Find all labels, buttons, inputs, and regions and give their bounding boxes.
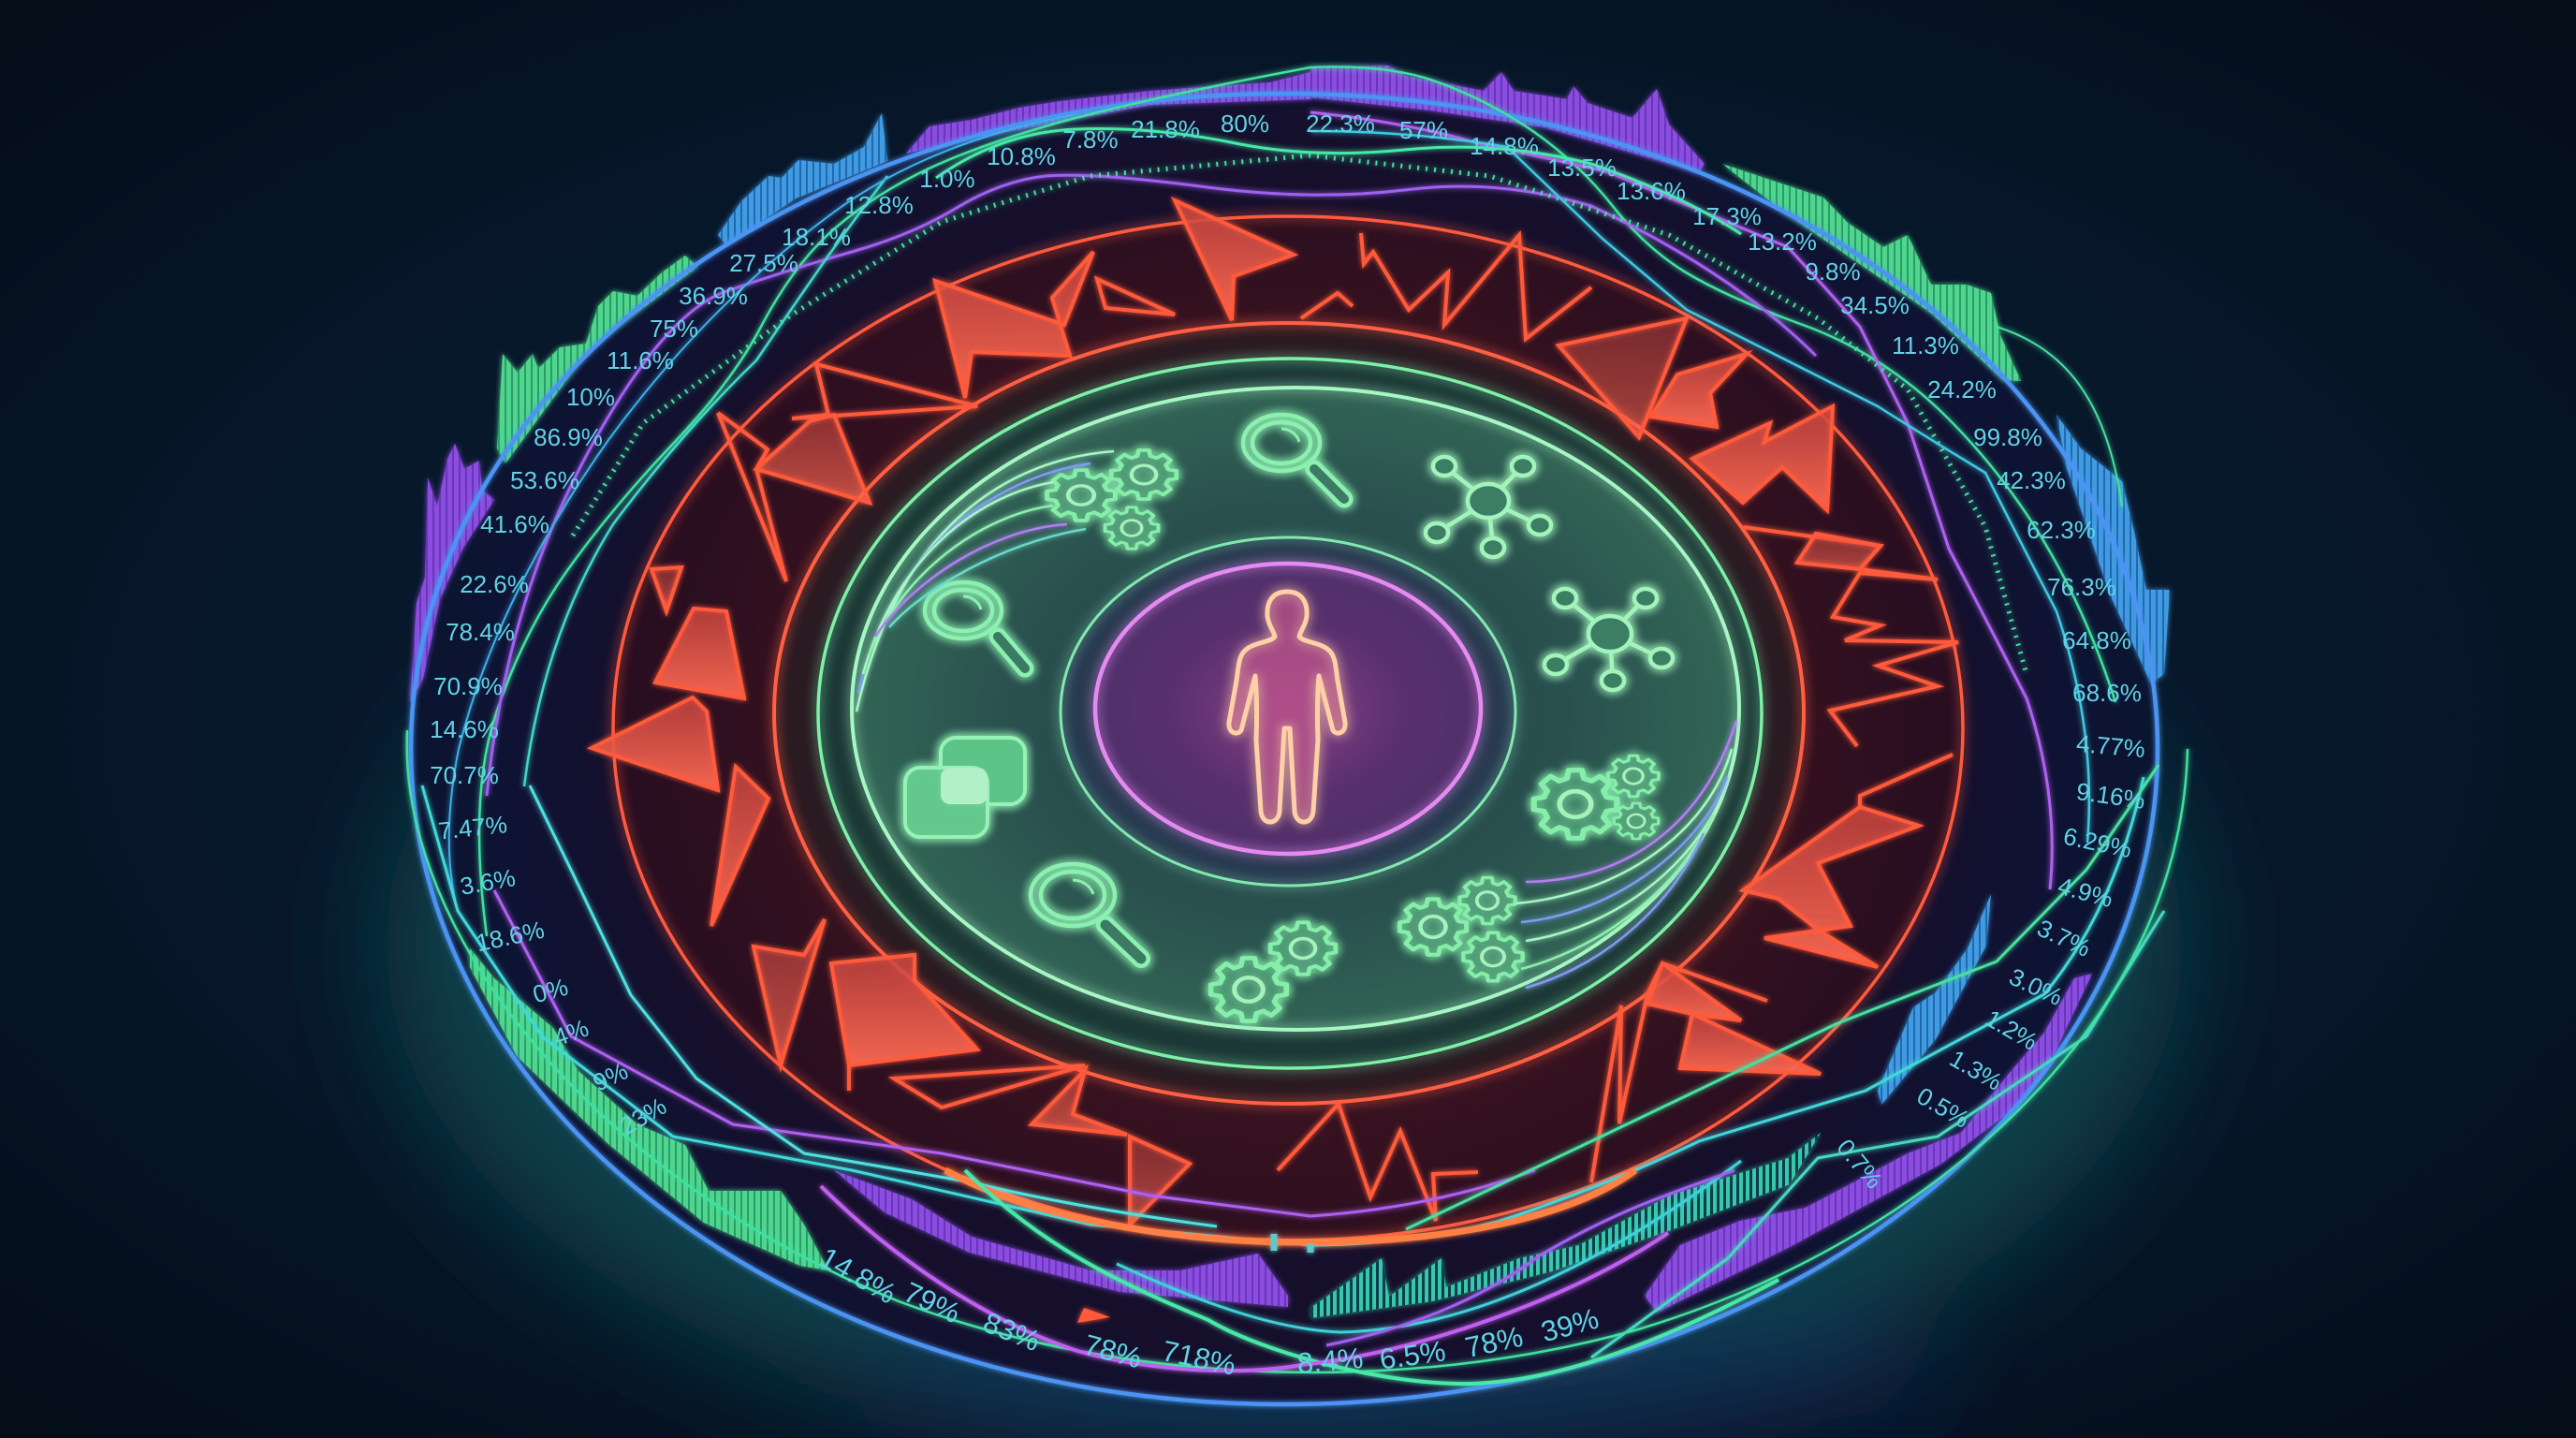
labels: left arc upper: 10.8% bbox=[987, 142, 1056, 170]
labels: left arc upper: 1.0% bbox=[919, 165, 975, 193]
green icons bbox=[905, 415, 1673, 1021]
labels: right arc upper: 64.8% bbox=[2062, 626, 2131, 654]
histogram: teal bottom bbox=[1310, 1133, 1821, 1318]
orbit: right tail bbox=[1997, 327, 2122, 506]
icon: network upper bbox=[1426, 457, 1551, 557]
histogram: purple top right bbox=[1310, 66, 1705, 172]
shard: top bbox=[1175, 200, 1294, 320]
labels: right arc upper: 99.8% bbox=[1973, 423, 2042, 451]
labels: bottom arc: 79% bbox=[899, 1275, 965, 1329]
shard: right zigzag bbox=[1743, 527, 1958, 746]
labels: left arc upper: 70.9% bbox=[433, 672, 503, 700]
shard: top zigzag bbox=[1361, 233, 1591, 339]
icon: magnifier top bbox=[1243, 415, 1344, 499]
shard: stray fragment bottom bbox=[1077, 1308, 1110, 1323]
labels: left arc upper: 41.6% bbox=[480, 510, 549, 538]
shard: upper right fold bbox=[1651, 354, 1747, 427]
histogram ring bbox=[410, 66, 2170, 1318]
shard: left thin lines bbox=[792, 364, 977, 418]
labels: bottom arc: 83% bbox=[978, 1306, 1045, 1357]
labels: right arc upper: 34.5% bbox=[1840, 291, 1910, 319]
orbit: teal upper right bbox=[1310, 131, 2089, 843]
orbit: purple lower bbox=[494, 890, 1535, 1216]
orbit: dotted green bbox=[573, 155, 2027, 674]
labels: left arc lower: 9% bbox=[589, 1056, 632, 1097]
labels: right arc upper: 57% bbox=[1399, 116, 1448, 144]
shard: small triangle bbox=[1097, 279, 1175, 315]
orbit: blue teal left bbox=[449, 114, 1076, 911]
orbit: green up right bbox=[1406, 765, 2159, 1229]
labels: right arc lower: 1.3% bbox=[1945, 1044, 2007, 1096]
labels: right arc lower: 9.16% bbox=[2074, 777, 2147, 814]
small teal bars bbox=[1274, 1234, 1310, 1253]
orbit lines bbox=[407, 66, 2188, 1404]
shard: lower right wedge bbox=[1647, 963, 1741, 1020]
ring: red inner bbox=[774, 323, 1804, 1104]
labels: right arc upper: 17.3% bbox=[1692, 202, 1762, 230]
shard: lower right large bbox=[1680, 1014, 1821, 1074]
labels: left arc upper: 7.8% bbox=[1062, 125, 1119, 154]
ring: purple bbox=[1095, 564, 1481, 854]
labels: right arc upper: 62.3% bbox=[2027, 516, 2096, 544]
orbit: teal upper left bbox=[524, 176, 887, 786]
shard: upper right triangle bbox=[1559, 318, 1687, 437]
shard: bottom small bbox=[1032, 1070, 1127, 1135]
labels: left arc lower: 7.47% bbox=[437, 810, 508, 845]
labels: right arc upper: 13.6% bbox=[1617, 177, 1686, 205]
labels: bottom arc: 8.4% bbox=[1295, 1342, 1365, 1380]
ring: red outer bbox=[613, 216, 1963, 1240]
labels: bottom arc: 14.8% bbox=[814, 1240, 902, 1311]
shard: upper left large bbox=[935, 252, 1093, 398]
labels: bottom arc: 718% bbox=[1159, 1334, 1238, 1382]
labels: right arc lower: 0.5% bbox=[1912, 1081, 1974, 1134]
labels: right arc upper: 9.8% bbox=[1805, 257, 1861, 286]
shard: lower spike bbox=[847, 1058, 851, 1091]
labels: left arc lower: 0% bbox=[530, 973, 571, 1008]
labels: left arc upper: 75% bbox=[650, 315, 698, 343]
labels: right arc upper: 76.3% bbox=[2047, 573, 2116, 601]
shard: right bolt tip bbox=[1860, 755, 1953, 807]
labels: left arc upper: 11.6% bbox=[607, 346, 674, 374]
icon: magnifier bottom bbox=[1031, 864, 1141, 959]
orbit: green sweep bbox=[965, 1170, 1778, 1384]
green disk bbox=[852, 388, 1739, 1030]
labels: left arc lower: 23% bbox=[615, 1092, 671, 1140]
labels: right arc lower: 3.0% bbox=[2005, 962, 2067, 1011]
labels: right arc lower: 4.77% bbox=[2075, 729, 2146, 763]
histogram: purple top left bbox=[906, 72, 1310, 154]
labels: left arc upper: 12.8% bbox=[844, 191, 914, 219]
labels: right arc lower: 3.7% bbox=[2033, 914, 2095, 962]
labels: right arc upper: 13.2% bbox=[1748, 227, 1817, 256]
labels: bottom arc: 78% bbox=[1080, 1328, 1145, 1374]
labels: left arc upper: 21.8% bbox=[1131, 115, 1200, 143]
stream: lower right bbox=[1516, 721, 1736, 988]
outer dark disc bbox=[411, 94, 2158, 1404]
labels: right arc lower bbox=[1831, 729, 2147, 1194]
histogram: purple lower right bbox=[1645, 974, 2092, 1313]
labels: right arc upper: 11.3% bbox=[1892, 331, 1959, 360]
orbit: green top wave bbox=[936, 129, 1741, 234]
shard: upper right cluster bbox=[1692, 406, 1833, 510]
labels: bottom arc: 39% bbox=[1538, 1302, 1603, 1348]
labels: right arc upper: 14.8% bbox=[1470, 132, 1539, 160]
labels: left arc lower: 14.6% bbox=[430, 715, 499, 743]
labels: right arc lower: 0.7% bbox=[1831, 1134, 1889, 1194]
histogram: green top right bbox=[1722, 164, 2021, 381]
shard: lower left B bbox=[831, 955, 977, 1065]
orbit: orange arc bbox=[945, 1170, 1635, 1242]
ring: green outer bbox=[818, 359, 1762, 1068]
orbit: purple sweep bbox=[821, 1186, 1668, 1371]
histogram: blue right bbox=[2056, 415, 2170, 683]
shard: bottom outline bbox=[894, 1065, 1085, 1108]
labels: right arc lower: 6.29% bbox=[2061, 822, 2134, 863]
ring: thin green around centre bbox=[1061, 537, 1515, 886]
shard: mid left bbox=[655, 609, 744, 698]
shard: lower left A bbox=[754, 919, 825, 1065]
purple centre bbox=[1095, 564, 1481, 854]
concentric rings bbox=[613, 216, 1963, 1240]
orbit: purple V bbox=[1326, 1170, 1734, 1345]
histogram: blue lower right bbox=[1878, 894, 1991, 1105]
shard: mid left top bbox=[651, 567, 681, 611]
labels: left arc upper: 78.4% bbox=[446, 618, 515, 646]
labels: left arc lower: 3.6% bbox=[458, 863, 518, 901]
histogram: blue upper left bbox=[718, 113, 887, 245]
labels: right arc upper: 42.3% bbox=[1997, 466, 2066, 494]
histogram: green lower left bbox=[470, 948, 828, 1270]
red outer band bbox=[613, 216, 1963, 1240]
histogram: purple left bbox=[410, 444, 494, 702]
labels: left arc upper: 80% bbox=[1221, 110, 1269, 138]
orbit: green long arc bbox=[479, 66, 2115, 936]
labels: bottom arc bbox=[814, 1240, 1603, 1382]
labels: left arc upper: 10% bbox=[566, 383, 615, 411]
labels: left arc lower bbox=[430, 715, 671, 1140]
icon: person bbox=[1229, 592, 1345, 822]
shard: bottom zigzag bbox=[1278, 1104, 1478, 1221]
icon: gears bottom bbox=[1211, 922, 1336, 1021]
labels: right arc upper bbox=[1306, 110, 2142, 707]
labels: bottom arc: 6.5% bbox=[1378, 1334, 1447, 1376]
orbit: teal cross bbox=[1117, 1161, 1741, 1332]
shard: bottom triangle bbox=[1130, 1137, 1190, 1225]
labels: left arc upper: 36.9% bbox=[679, 282, 748, 310]
ring: green inner bbox=[852, 388, 1739, 1030]
middle dark disc bbox=[1061, 537, 1515, 886]
labels: left arc upper bbox=[433, 110, 1269, 700]
labels: left arc upper: 86.9% bbox=[534, 423, 603, 451]
shard: left star bbox=[592, 697, 718, 790]
labels: right arc lower: 4.9% bbox=[2055, 872, 2116, 913]
histogram: green upper left bbox=[497, 256, 697, 463]
icon: gears upper left bbox=[1047, 450, 1177, 549]
red shards ring bbox=[592, 200, 1958, 1323]
labels: left arc upper: 22.6% bbox=[460, 570, 529, 598]
ring: blue outer bbox=[411, 94, 2158, 1404]
green outer band bbox=[818, 359, 1762, 1068]
shard: right fill bbox=[1797, 534, 1881, 569]
icon: gears right bbox=[1534, 756, 1659, 839]
icon: overlapping squares bbox=[905, 738, 1025, 837]
orbit: outer green lower bbox=[407, 730, 2188, 1372]
labels: bottom arc: 78% bbox=[1462, 1320, 1526, 1364]
shard: left spike bbox=[718, 413, 786, 581]
glow under the disc bbox=[386, 440, 2183, 1438]
shard: left dagger bbox=[711, 767, 768, 926]
labels: left arc lower: 70.7% bbox=[430, 761, 499, 789]
red inner band bbox=[774, 323, 1804, 1104]
shard: lower right spike bbox=[1591, 963, 1767, 1182]
histogram: purple bottom bbox=[834, 1170, 1288, 1307]
labels: left arc upper: 18.1% bbox=[782, 223, 851, 251]
labels: right arc upper: 22.3% bbox=[1306, 110, 1375, 138]
shard: right bolt bbox=[1743, 807, 1919, 967]
orbit: purple upper right bbox=[1310, 112, 2052, 889]
stream: upper left bbox=[856, 451, 1114, 712]
light streams in green disk bbox=[856, 451, 1736, 988]
shard: top small zigzag bbox=[1301, 293, 1353, 318]
orbit: teal bright bbox=[530, 785, 1217, 1226]
icon: network right bbox=[1544, 589, 1673, 690]
orbit: purple upper left bbox=[487, 175, 1816, 796]
labels: right arc upper: 13.5% bbox=[1547, 154, 1617, 182]
labels: right arc upper: 68.6% bbox=[2072, 679, 2142, 707]
labels: left arc upper: 27.5% bbox=[729, 249, 798, 277]
labels: right arc upper: 24.2% bbox=[1927, 375, 1997, 404]
icon: gears lower right bbox=[1399, 878, 1523, 981]
percentage labels bbox=[430, 110, 2147, 1382]
orbit: green lower right bbox=[1591, 911, 2164, 1357]
labels: right arc lower: 1.2% bbox=[1981, 1004, 2042, 1056]
labels: left arc lower: 18.6% bbox=[474, 916, 547, 957]
icon: magnifier left bbox=[925, 582, 1025, 668]
central person bbox=[1229, 592, 1345, 822]
labels: left arc upper: 53.6% bbox=[510, 466, 579, 494]
labels: left arc lower: 4% bbox=[549, 1013, 593, 1052]
shard: left kite bbox=[756, 415, 870, 503]
orbit: teal lower long bbox=[422, 777, 2144, 1245]
